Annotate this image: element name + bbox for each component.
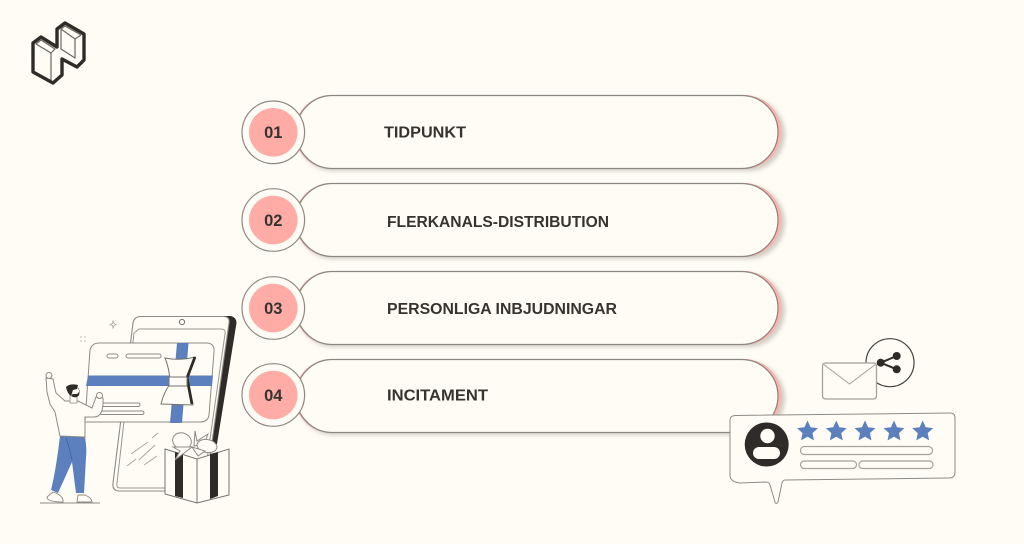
number badge 02 — [242, 189, 305, 251]
icon: envelope — [822, 363, 876, 399]
logo — [33, 23, 84, 83]
label: TIDPUNKT — [384, 124, 467, 141]
row 3: PERSONLIGA INBJUDNINGAR — [242, 271, 785, 347]
five star rating — [797, 420, 933, 440]
icon: gift box — [165, 430, 229, 503]
number badge 01: 01 — [264, 124, 282, 142]
icon: bow — [161, 357, 195, 405]
row 1: TIDPUNKT — [242, 95, 785, 171]
number badge 02: 02 — [264, 212, 282, 230]
number badge 01 — [242, 101, 305, 164]
sparkles — [80, 321, 116, 341]
label: INCITAMENT — [387, 388, 489, 404]
icon: gift card — [85, 343, 214, 423]
number badge 04 — [242, 364, 305, 426]
illustration: gift card on tablet with man and gift box — [40, 316, 236, 503]
illustration: share envelope and review card — [730, 339, 955, 504]
review text lines — [800, 446, 933, 468]
number badge 03 — [242, 277, 305, 339]
number badge 04: 04 — [264, 387, 283, 405]
number badge 03: 03 — [264, 300, 282, 318]
icon: tablet — [113, 316, 236, 491]
row 4: INCITAMENT — [242, 359, 785, 435]
label: FLERKANALS-DISTRIBUTION — [387, 214, 609, 231]
icon: avatar — [745, 422, 789, 466]
icon: share circle — [866, 339, 914, 387]
row 2: FLERKANALS-DISTRIBUTION — [242, 183, 785, 259]
label: PERSONLIGA INBJUDNINGAR — [387, 301, 617, 318]
icon: man cheering — [40, 372, 103, 503]
review card — [730, 413, 955, 504]
